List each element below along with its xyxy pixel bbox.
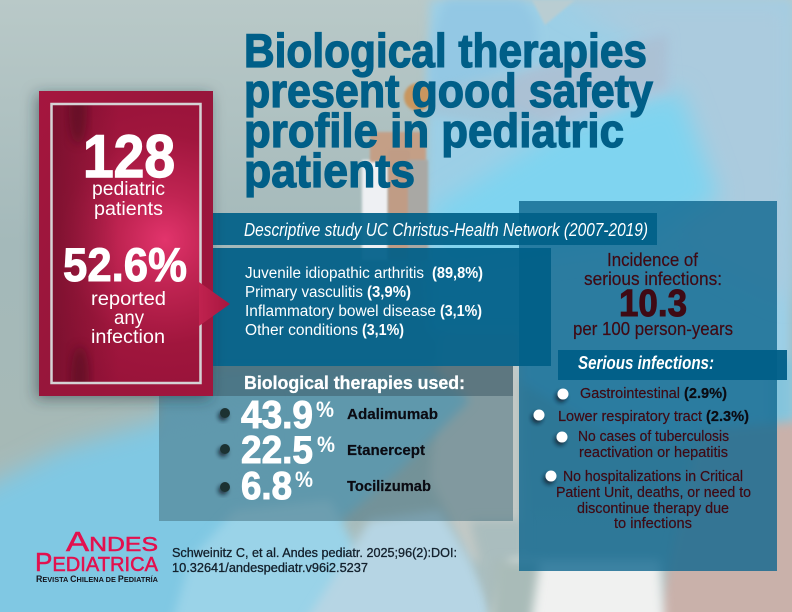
logo: Andes Pediatrica	[35, 526, 159, 584]
logo: Andes Pediatrica: REVISTA CHILENA DE PEDIATRÍA	[36, 574, 159, 584]
light glove bottom centre	[170, 500, 400, 612]
52.6% reported any infection: 52.6%	[63, 238, 187, 291]
citation: Schweinitz C, et al. Andes pediatr. 2025;96(2):DOI:	[172, 546, 457, 560]
incidence text: 10.3	[619, 283, 687, 325]
title: Biological therapies	[244, 24, 647, 77]
adalimumab row: Adalimumab	[347, 407, 438, 423]
panel: conditions list: (3,1%)	[362, 322, 404, 339]
title: present good safety	[244, 64, 653, 117]
serious infections list: Gastrointestinal	[580, 386, 680, 402]
etanercept row: %	[317, 432, 335, 457]
serious infections band: Serious infections:	[578, 353, 714, 373]
128 pediatric patients	[83, 123, 175, 220]
serious infections list: Lower respiratory tract	[558, 409, 702, 425]
main glove	[425, 0, 792, 440]
panel: incidence of serious infections	[519, 201, 787, 571]
incidence text: Incidence of	[607, 250, 699, 270]
title: profile in pediatric	[244, 104, 624, 157]
incidence text: per 100 person-years	[573, 319, 733, 339]
panel: biological therapies used	[159, 366, 513, 521]
incidence text: serious infections:	[584, 269, 722, 289]
tocilizumab row: Tocilizumab	[347, 479, 431, 495]
study header band	[213, 213, 657, 245]
incidence text	[573, 250, 733, 339]
etanercept row: 22.5	[241, 429, 313, 472]
tocilizumab row: %	[295, 467, 313, 492]
adalimumab row: 43.9	[241, 394, 313, 437]
serious infections list: No cases of tuberculosis	[578, 429, 729, 445]
serious infections band	[558, 350, 787, 380]
etanercept row: Etanercept	[347, 443, 425, 459]
serious infections list	[534, 386, 751, 532]
logo: Andes Pediatrica: ANDES	[66, 526, 158, 557]
panel: conditions list: Primary vasculitis	[245, 284, 363, 301]
etanercept row	[220, 429, 425, 472]
serious infections list: discontinue therapy due	[577, 501, 729, 517]
panel: conditions list: (89,8%)	[432, 265, 483, 282]
serious infections list: reactivation or hepatitis	[579, 445, 728, 461]
citation: 10.32641/andespediatr.v96i2.5237	[172, 561, 368, 575]
serious infections list: (2.9%)	[684, 386, 727, 402]
adalimumab row	[220, 394, 438, 437]
adalimumab row: %	[316, 397, 334, 422]
grey area behind therapies panel	[430, 330, 522, 570]
52.6% reported any infection: infection	[91, 326, 165, 348]
right edge glove	[770, 360, 792, 440]
serious infections list: (2.3%)	[706, 409, 749, 425]
tocilizumab row: 6.8	[241, 465, 292, 508]
panel: conditions list	[213, 248, 551, 366]
panel: conditions list: Other conditions	[245, 322, 358, 339]
study header band: Descriptive study UC Christus-Health Network (2007-2019)	[244, 220, 648, 240]
128 pediatric patients: patients	[94, 198, 163, 220]
arrow pointer	[199, 282, 230, 326]
title: patients	[244, 144, 415, 197]
serious infections list: Patient Unit, deaths, or need to	[556, 485, 751, 501]
vial	[362, 160, 388, 260]
sky-blue sleeve lower left	[0, 400, 260, 612]
panel: conditions list: (3,1%)	[440, 303, 482, 320]
panel: conditions list: Juvenile idiopathic arthritis	[245, 265, 424, 282]
panel: conditions list: Inflammatory bowel disease	[245, 303, 436, 320]
logo: Andes Pediatrica: PEDIATRICA	[35, 547, 159, 577]
salmon sleeve bottom right	[655, 420, 792, 612]
128 pediatric patients: pediatric	[92, 178, 165, 200]
finger crease shadow	[418, 35, 668, 130]
128 pediatric patients: 128	[83, 123, 175, 190]
52.6% reported any infection: reported	[91, 288, 166, 310]
citation	[172, 546, 457, 575]
52.6% reported any infection: any	[114, 307, 144, 329]
title	[244, 24, 653, 197]
therapies heading: Biological therapies used:	[244, 372, 465, 393]
panel: conditions list: (3,9%)	[367, 284, 411, 301]
serious infections list: to infections	[614, 516, 692, 532]
52.6% reported any infection	[63, 238, 187, 348]
panel: key patient figures	[39, 80, 230, 406]
tocilizumab row	[220, 465, 431, 508]
finger upper	[429, 0, 538, 95]
serious infections list: No hospitalizations in Critical	[563, 469, 743, 485]
